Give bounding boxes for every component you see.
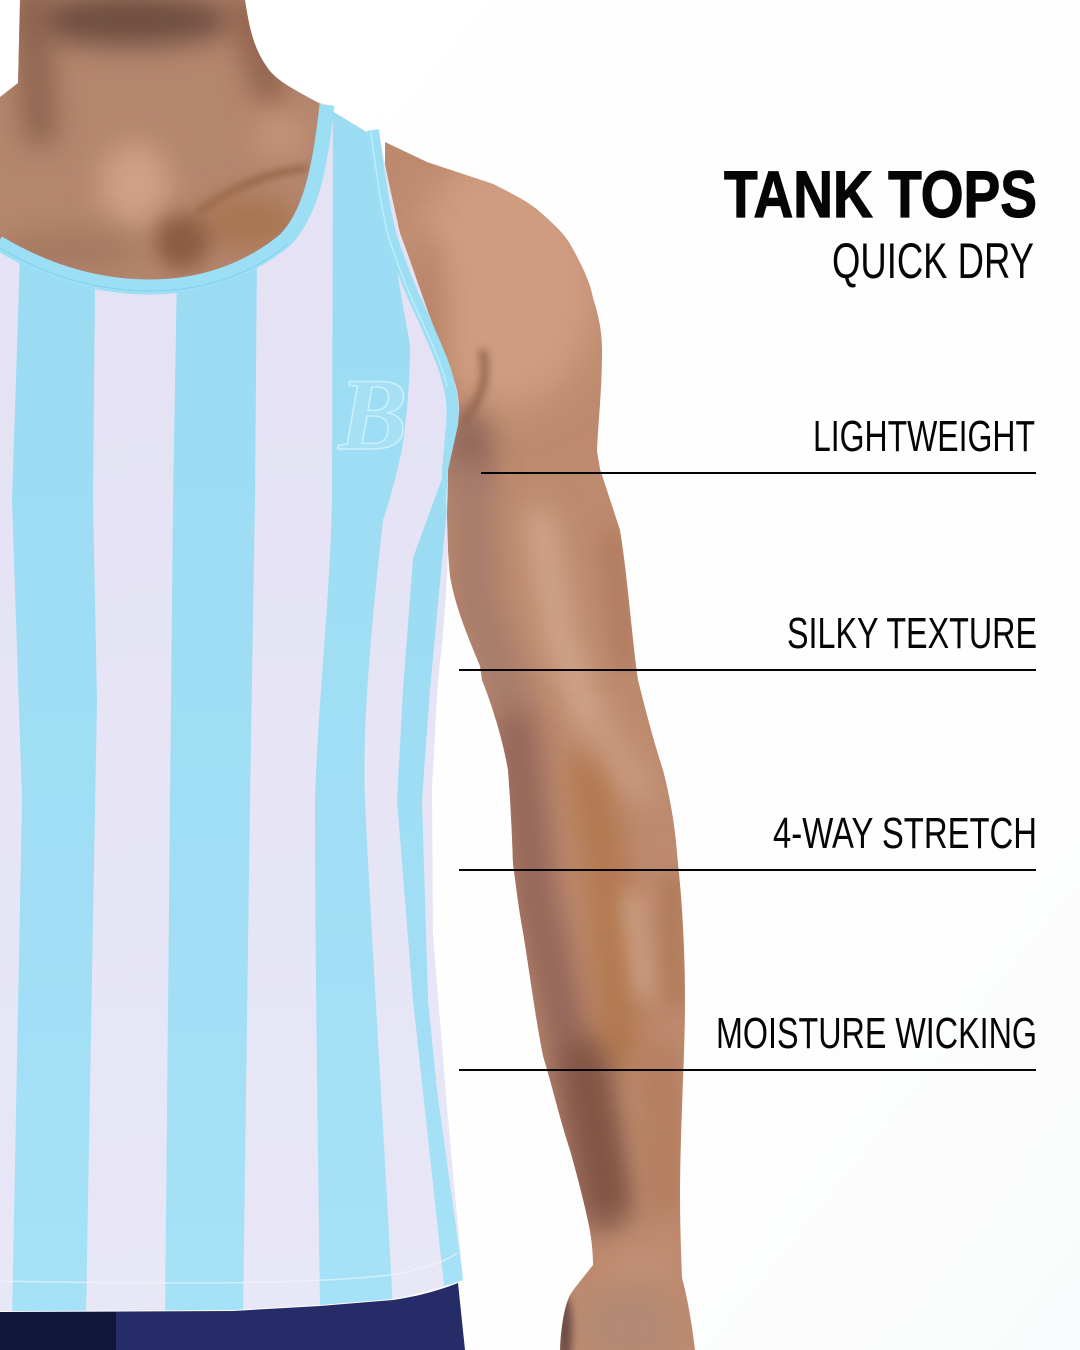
brand monogram: B — [338, 358, 407, 472]
stripe 2 — [165, 250, 257, 1320]
stripe 1 — [12, 255, 97, 1320]
shirt base — [0, 102, 463, 1311]
hem stitching — [0, 1253, 457, 1283]
shorts — [0, 1283, 465, 1350]
tank top — [0, 100, 470, 1320]
neck and chest — [0, 0, 330, 300]
shorts left panel — [0, 1312, 116, 1350]
stripe 4 — [397, 478, 463, 1286]
neck trim — [0, 105, 327, 291]
model photo — [0, 0, 710, 1350]
stripe 3 — [315, 100, 410, 1310]
arm and shoulder — [380, 130, 710, 1350]
armhole trim — [371, 130, 458, 505]
